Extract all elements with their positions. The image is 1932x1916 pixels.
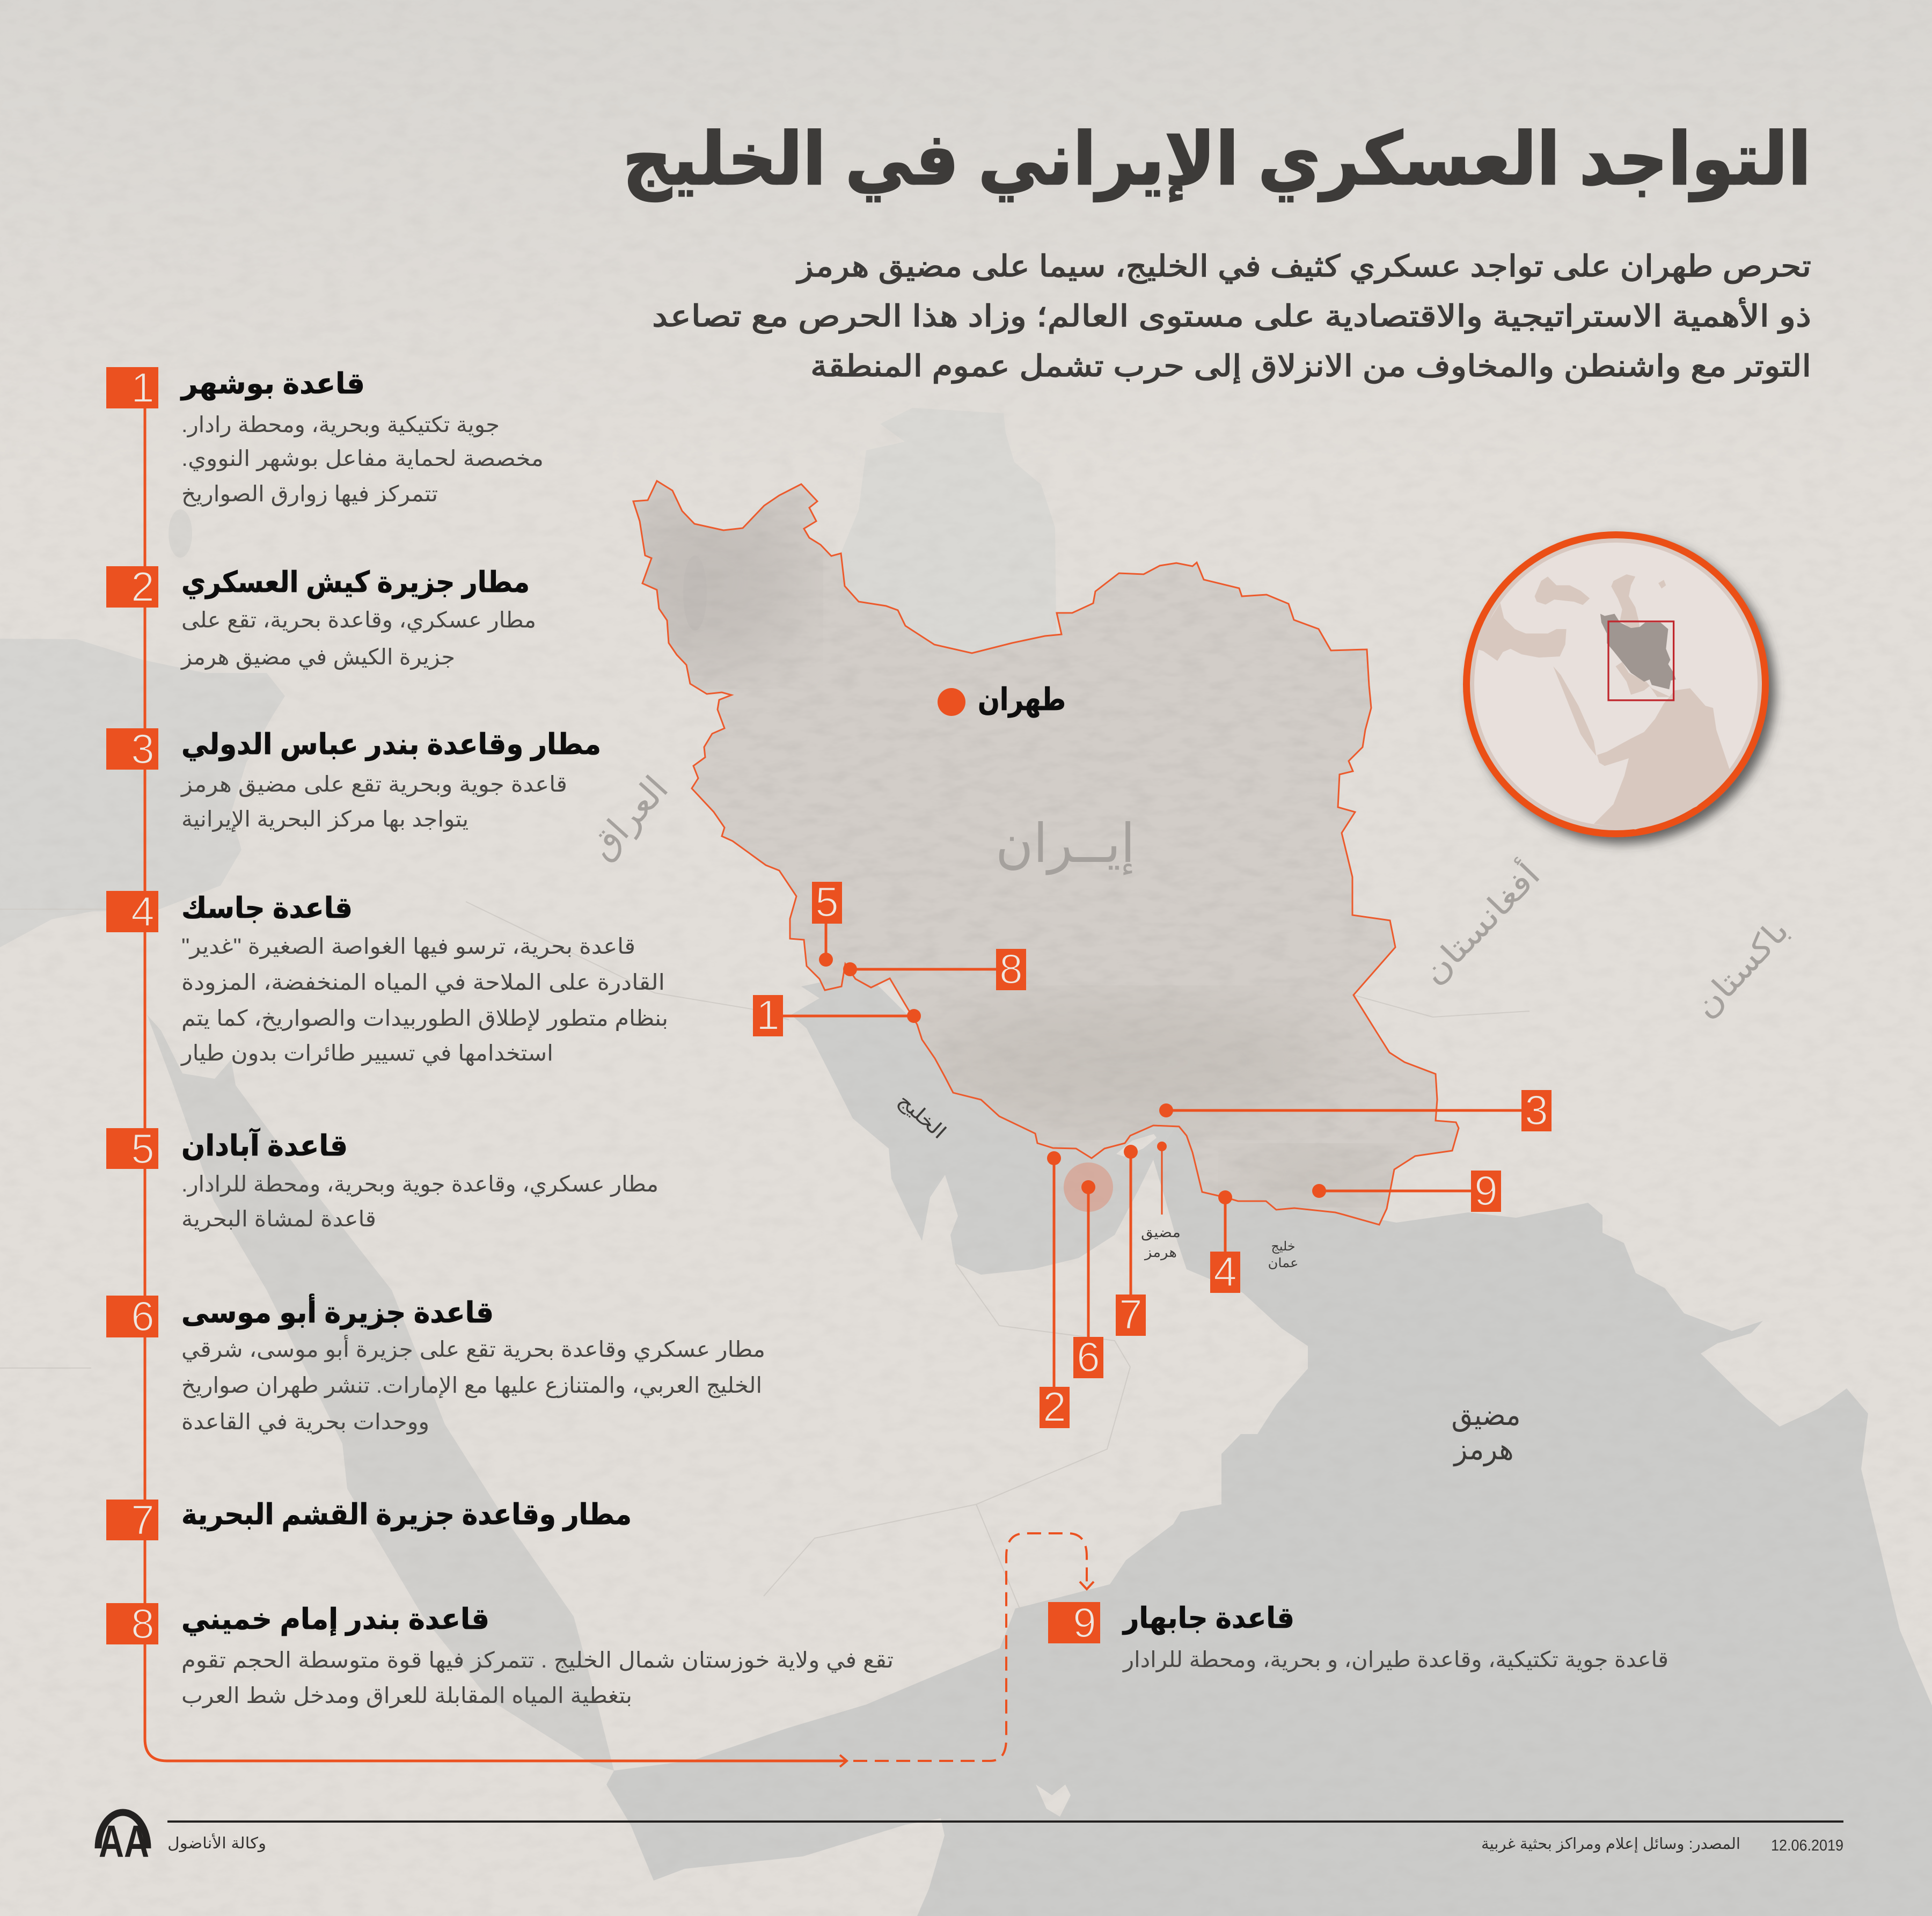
label: Strait of Hormuz small: مضيق: [1141, 1224, 1181, 1241]
item 4: Jask: قاعدة جاسك: [181, 892, 353, 924]
marker: Strait of Hormuz: [1157, 1142, 1167, 1215]
item 1: Bushehr: [106, 364, 544, 507]
label: Strait of Hormuz large: مضيق: [1451, 1399, 1521, 1432]
item 5: Abadan: 5: [131, 1125, 155, 1172]
intro text: التوتر مع واشنطن والمخاوف من الانزلاق إلى حرب تشمل عموم المنطقة: [810, 349, 1811, 384]
marker 6: 6: [1077, 1333, 1100, 1380]
marker 5: [812, 878, 842, 967]
item 4: Jask: [106, 888, 668, 1066]
label: the Gulf: الخليج: [894, 1089, 950, 1144]
item 1: Bushehr: جوية تكتيكية وبحرية، ومحطة رادار.: [181, 412, 500, 437]
item 4: Jask: القادرة على الملاحة في المياه المنخفضة، المزودة: [181, 970, 665, 996]
sea: Red Sea: [147, 1015, 614, 1771]
map: Iran: [617, 472, 1476, 1234]
inset: Aral: [1658, 580, 1666, 589]
item 9: Chabahar: قاعدة جابهار: [1122, 1602, 1294, 1635]
item 3: Bandar Abbas: قاعدة جوية وبحرية تقع على مضيق هرمز: [180, 772, 567, 797]
label: Afghanistan: أفغانستان: [1413, 854, 1547, 991]
inset: Black Sea: [1535, 576, 1590, 605]
footer rule: [167, 1820, 1843, 1823]
intro text: ذو الأهمية الاستراتيجية والاقتصادية على مستوى العالم؛ وزاد هذا الحرص مع تصاعد: [652, 297, 1811, 334]
marker 8: 8: [999, 945, 1023, 992]
marker 8: [843, 945, 1026, 992]
lake: [169, 509, 192, 558]
item 1: Bushehr: قاعدة بوشهر: [180, 368, 365, 400]
label: Gulf of Oman: [1268, 1239, 1299, 1270]
item 5: Abadan: مطار عسكري، وقاعدة جوية وبحرية، ومحطة للرادار.: [181, 1172, 658, 1197]
inset locator map: [1463, 531, 1769, 837]
item 3: Bandar Abbas: 3: [131, 725, 155, 772]
marker 9: 9: [1474, 1167, 1498, 1214]
island: Qeshm: [1116, 1134, 1157, 1157]
item 7: Qeshm: 7: [131, 1496, 155, 1544]
item 8: Bandar Imam Khomeini: 8: [131, 1600, 155, 1647]
item 5: Abadan: قاعدة آبادان: [181, 1128, 348, 1162]
item 7: Qeshm: [106, 1496, 632, 1544]
item 6: Abu Musa: مطار عسكري وقاعدة بحرية تقع على جزيرة أبو موسى، شرقي: [181, 1335, 765, 1363]
inset: Red Sea: [1553, 667, 1597, 756]
inset: Mediterranean: [1475, 603, 1567, 661]
item 9: Chabahar: [1048, 1599, 1668, 1672]
item 1: Bushehr: مخصصة لحماية مفاعل بوشهر النووي.: [181, 446, 544, 471]
marker 2: 2: [1043, 1383, 1066, 1430]
item 2: Kish: 2: [131, 563, 155, 610]
land borders: [0, 902, 1529, 1608]
marker 9: [1312, 1167, 1501, 1214]
label: Strait of Hormuz large: هرمز: [1453, 1434, 1513, 1466]
marker 4: 4: [1213, 1248, 1237, 1295]
item 1: Bushehr: تتمركز فيها زوارق الصواريخ: [181, 481, 438, 507]
item 9: Chabahar: قاعدة جوية تكتيكية، وقاعدة طيران، و بحرية، ومحطة للرادار: [1122, 1647, 1668, 1672]
item 6: Abu Musa: الخليج العربي، والمتنازع عليها مع الإمارات. تنشر طهران صواريخ: [181, 1373, 762, 1399]
item 8: Bandar Imam Khomeini: [106, 1600, 894, 1708]
item 3: Bandar Abbas: يتواجد بها مركز البحرية الإيرانية: [181, 807, 469, 832]
item 5: Abadan: قاعدة لمشاة البحرية: [181, 1206, 376, 1232]
item 2: Kish: مطار عسكري، وقاعدة بحرية، تقع على: [181, 608, 536, 633]
label: Pakistan: باكستان: [1687, 912, 1796, 1025]
inset: Caspian: [1611, 574, 1640, 629]
item 7: Qeshm: مطار وقاعدة جزيرة القشم البحرية: [181, 1498, 632, 1531]
item 1: Bushehr: 1: [131, 364, 155, 411]
item 2: Kish: جزيرة الكيش في مضيق هرمز: [180, 645, 455, 670]
intro text: [652, 249, 1811, 384]
marker 7: [1116, 1145, 1146, 1338]
item 4: Jask: استخدامها في تسيير طائرات بدون طيار: [180, 1041, 553, 1066]
marker 3: 3: [1525, 1086, 1548, 1133]
title: التواجد العسكري الإيراني في الخليج: [623, 119, 1811, 202]
marker 5: 5: [815, 878, 839, 925]
label: Strait of Hormuz small: هرمز: [1144, 1244, 1177, 1261]
item 6: Abu Musa: 6: [131, 1292, 155, 1340]
label: Iran: إيــران: [996, 814, 1135, 875]
item 6: Abu Musa: ووحدات بحرية في القاعدة: [181, 1409, 429, 1435]
label: Strait of Hormuz large: [1451, 1399, 1521, 1466]
item 4: Jask: 4: [131, 888, 155, 935]
intro text: تحرص طهران على تواجد عسكري كثيف في الخليج، سيما على مضيق هرمز: [796, 249, 1811, 284]
inset: Indian Ocean: [1594, 688, 1730, 829]
item 3: Bandar Abbas: مطار وقاعدة بندر عباس الدولي: [181, 728, 601, 761]
item 2: Kish: [106, 563, 536, 670]
item 8: Bandar Imam Khomeini: بتغطية المياه المقابلة للعراق ومدخل شط العرب: [181, 1683, 632, 1708]
marker 2: [1040, 1151, 1070, 1430]
island: Socotra: [1036, 1785, 1071, 1817]
item 3: Bandar Abbas: [106, 725, 601, 832]
label: Strait of Hormuz small: [1141, 1224, 1181, 1261]
sea: Gulf of Oman, Arabian Sea: [606, 1122, 1932, 1916]
item 9: Chabahar: 9: [1073, 1599, 1096, 1646]
item 8: Bandar Imam Khomeini: تقع في ولاية خوزستان شمال الخليج . تتمركز فيها قوة متوسطة الحجم تقوم: [181, 1648, 894, 1673]
marker 6: [1073, 1180, 1103, 1380]
sea: Mediterranean: [0, 639, 285, 947]
agency name: وكالة الأناضول: [167, 1833, 266, 1852]
marker 4: [1210, 1190, 1240, 1295]
inset: locator rectangle: [1608, 621, 1674, 700]
item 4: Jask: قاعدة بحرية، ترسو فيها الغواصة الصغيرة "غدير": [181, 934, 635, 959]
label: Tehran: طهران: [978, 682, 1066, 718]
label: Gulf of Oman: عمان: [1268, 1256, 1299, 1270]
inset: Gulf: [1615, 662, 1670, 697]
source: المصدر: وسائل إعلام ومراكز بحثية غربية: [1481, 1835, 1740, 1853]
item 2: Kish: مطار جزيرة كيش العسكري: [181, 566, 530, 599]
marker 7: 7: [1119, 1291, 1143, 1338]
item 6: Abu Musa: قاعدة جزيرة أبو موسى: [181, 1293, 494, 1329]
marker halo 6: [1064, 1162, 1113, 1212]
item 5: Abadan: [106, 1125, 658, 1232]
label: Tehran: [938, 682, 1066, 718]
date: 12.06.2019: [1771, 1837, 1843, 1854]
timeline connector with arrow to item 9: [145, 408, 1094, 1767]
sea: Caspian: [841, 408, 1057, 666]
inset: Iran: [1600, 614, 1676, 689]
item 8: Bandar Imam Khomeini: قاعدة بندر إمام خميني: [181, 1603, 489, 1636]
AA logo: AA: [99, 1816, 149, 1867]
marker 1: 1: [756, 991, 780, 1039]
marker 3: [1159, 1086, 1552, 1133]
item 6: Abu Musa: [106, 1292, 765, 1435]
item 4: Jask: بنظام متطور لإطلاق الطوربيدات والصواريخ، كما يتم: [181, 1006, 668, 1031]
marker 1: [753, 991, 921, 1039]
label: Iraq: العراق: [581, 769, 676, 867]
label: Gulf of Oman: خليج: [1271, 1239, 1296, 1254]
sea: Persian Gulf: [791, 966, 1189, 1275]
